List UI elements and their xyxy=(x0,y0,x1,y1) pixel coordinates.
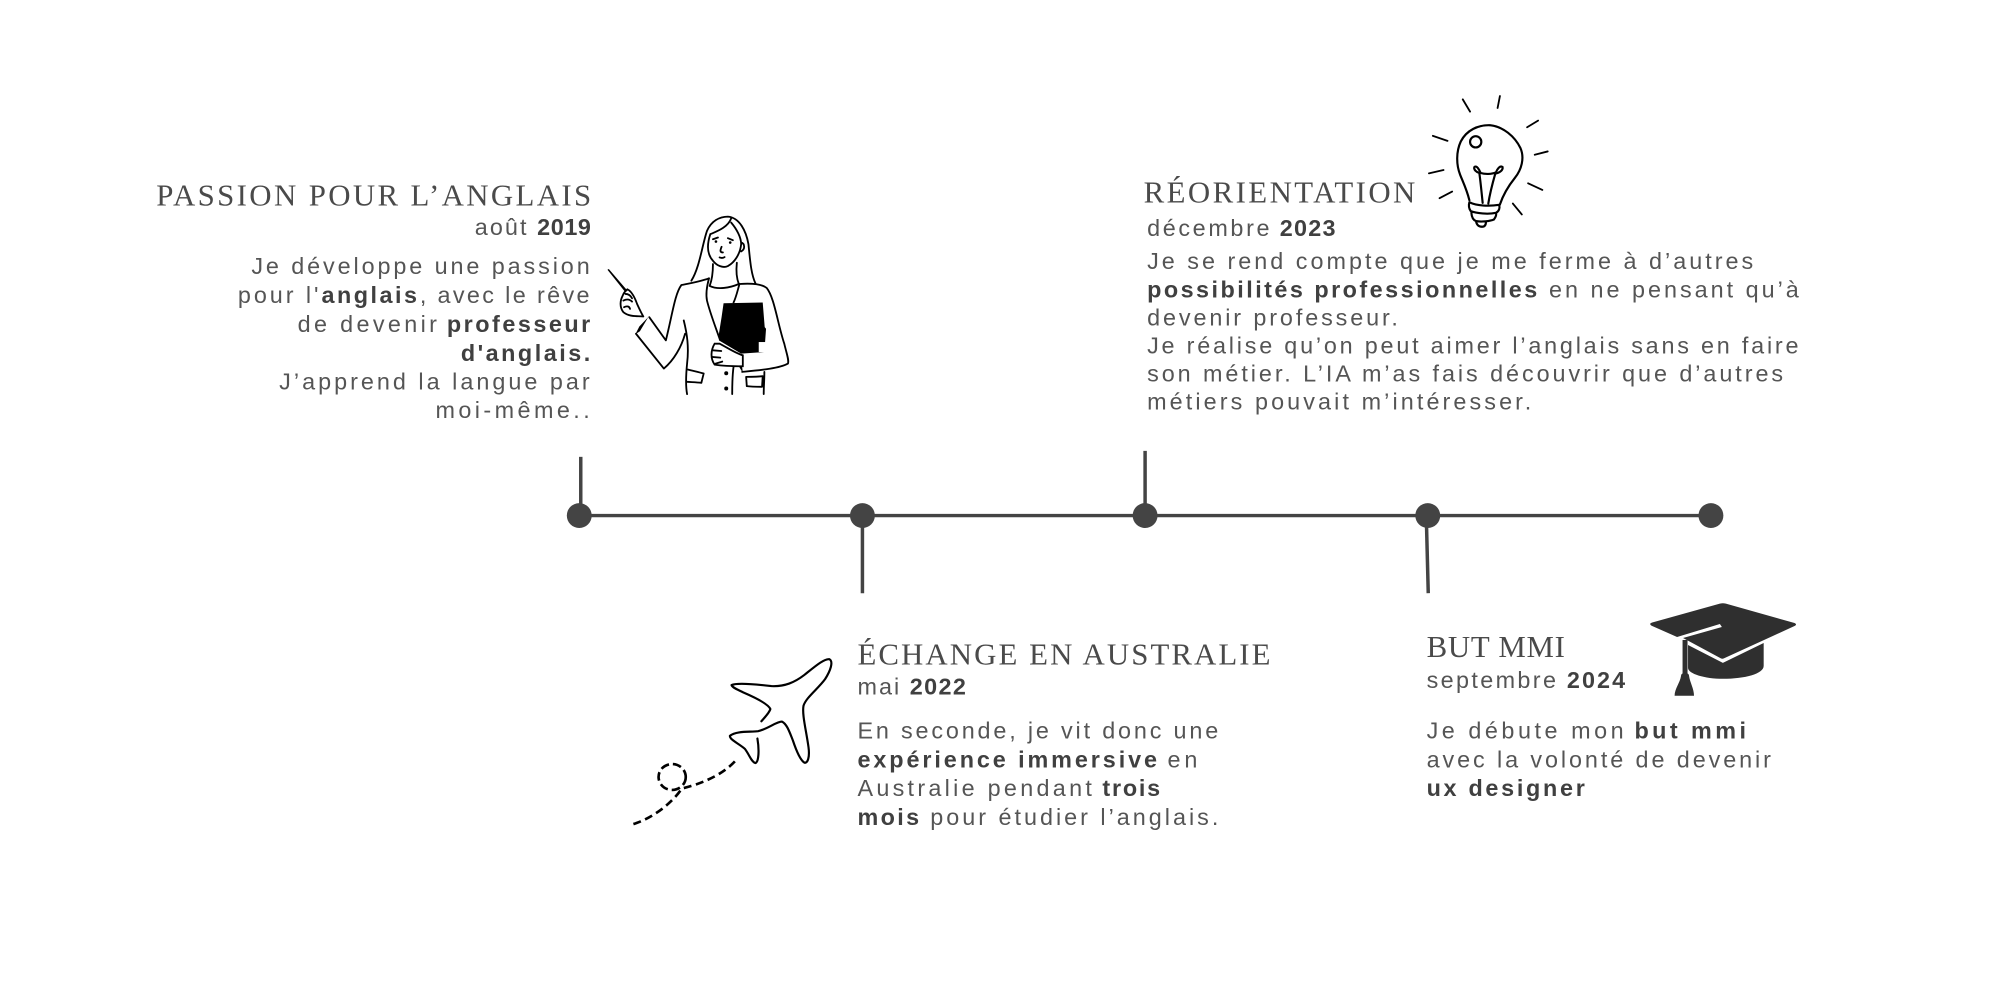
date: mai 2022: mai xyxy=(857,674,899,700)
text block: passion xyxy=(238,253,590,423)
text block: BUT MMI xyxy=(1427,718,1771,801)
text block: réorientation: possibilités professionnelles xyxy=(1147,276,1537,302)
text block: passion: professeur xyxy=(447,311,590,337)
text block: réorientation xyxy=(1147,248,1799,415)
text block: passion: pour l' xyxy=(238,282,318,308)
text block: passion: moi-même.. xyxy=(435,397,590,423)
icon: woman teacher xyxy=(607,217,788,394)
heading: BUT MMI: BUT MMI xyxy=(1427,630,1565,664)
date: août 2019: août xyxy=(475,214,527,240)
text block: BUT MMI: avec la volonté de devenir xyxy=(1427,746,1771,772)
text block: passion: Je développe une passion xyxy=(251,253,590,279)
date: mai 2022: 2022 xyxy=(910,674,966,700)
heading: passion: PASSION POUR L’ANGLAIS xyxy=(156,179,591,213)
text block: échange: Australie pendant xyxy=(857,775,1092,801)
text block: passion: anglais xyxy=(321,282,417,308)
date: décembre 2023: 2023 xyxy=(1280,215,1335,241)
timeline xyxy=(567,451,1723,593)
date: décembre 2023: décembre xyxy=(1147,215,1270,241)
text block: réorientation: Je réalise qu’on peut aimer l’anglais sans en faire xyxy=(1147,332,1799,358)
date: août 2019 xyxy=(475,214,591,240)
text block: échange: mois xyxy=(857,804,919,830)
text block: passion: d'anglais. xyxy=(461,340,590,366)
date: septembre 2024: septembre xyxy=(1427,667,1556,693)
text block: échange: en xyxy=(1167,746,1197,772)
icon: light bulb xyxy=(1429,96,1548,227)
text block: BUT MMI: ux designer xyxy=(1427,775,1585,801)
text block: réorientation: en ne pensant qu’à xyxy=(1549,276,1799,302)
text block: échange: trois xyxy=(1102,775,1160,801)
text block: réorientation: Je se rend compte que je me ferme à d’autres xyxy=(1147,248,1753,274)
text block: réorientation: métiers pouvait m’intéresser. xyxy=(1147,389,1531,415)
text block: échange: expérience immersive xyxy=(857,746,1157,772)
date: septembre 2024: 2024 xyxy=(1567,667,1625,693)
text block: échange: pour étudier l’anglais. xyxy=(930,804,1218,830)
text block: passion: de devenir xyxy=(298,311,437,337)
icon: airplane with dashed path xyxy=(633,659,831,824)
text block: passion: , avec le rêve xyxy=(420,282,590,308)
text block: réorientation: son métier. L’IA m’as fais découvrir que d’autres xyxy=(1147,360,1783,386)
heading: échange: ÉCHANGE EN AUSTRALIE xyxy=(857,636,1271,671)
date: août 2019: 2019 xyxy=(537,214,591,240)
panel: échange en Australie xyxy=(857,636,1271,830)
panel: passion pour l'anglais xyxy=(156,179,591,423)
text block: réorientation: devenir professeur. xyxy=(1147,304,1398,330)
text block: BUT MMI: Je débute mon xyxy=(1427,718,1624,744)
text block: échange xyxy=(857,718,1218,830)
date: septembre 2024 xyxy=(1427,667,1625,693)
date: décembre 2023 xyxy=(1147,215,1335,241)
icon: graduation cap xyxy=(1650,603,1796,696)
panel: BUT MMI xyxy=(1427,630,1771,801)
panel: réorientation xyxy=(1144,175,1799,415)
heading: réorientation: RÉORIENTATION xyxy=(1144,175,1415,210)
date: mai 2022 xyxy=(857,674,966,700)
text block: passion: J’apprend la langue par xyxy=(279,369,590,395)
text block: BUT MMI: but mmi xyxy=(1634,718,1746,744)
text block: échange: En seconde, je vit donc une xyxy=(857,718,1218,744)
